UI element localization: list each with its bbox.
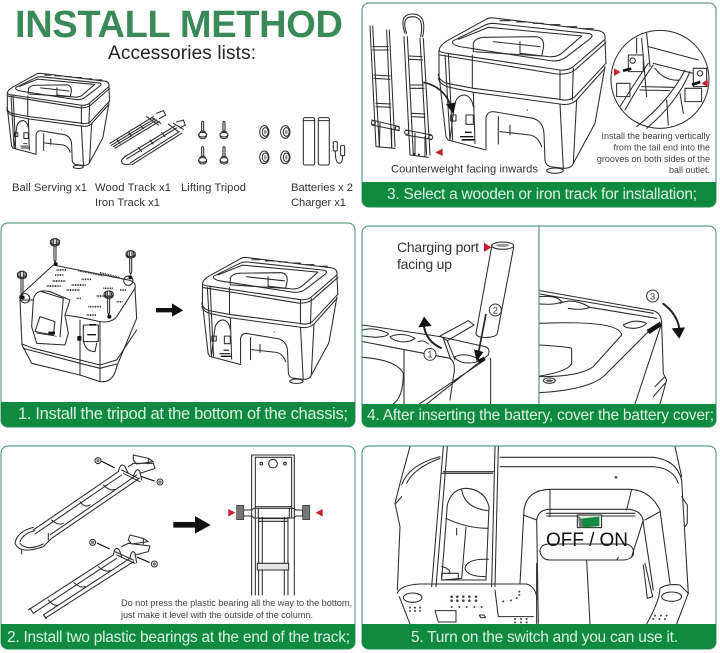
step 1 caption bar: 1. Install the tripod at the bottom of the chassis; [18, 405, 348, 423]
step number 3 [647, 290, 659, 302]
arrow: close cover [663, 303, 685, 339]
step 1 caption bar [1, 402, 355, 427]
charging port note [397, 239, 479, 272]
bearing note: grooves on both sides of the [597, 154, 710, 164]
icon: wood track with bearings [28, 535, 157, 618]
accessory labels: Charger x1 [291, 197, 346, 209]
arrow: to front view [173, 516, 211, 534]
charging port note: facing up [397, 256, 452, 272]
icon: bearings [260, 126, 290, 164]
panel: step 3 select track [362, 3, 716, 207]
bearing press note [120, 598, 352, 620]
assembled machine [202, 257, 338, 383]
bearing press note: Do not press the plastic bearing all the way to the bottom, [121, 598, 352, 608]
panel: step 2 install bearings [1, 446, 355, 649]
arrow: track insert [423, 82, 456, 114]
step 3 caption bar [362, 182, 716, 207]
step number 3: 3 [650, 291, 655, 301]
step 4 caption bar: 4. After inserting the battery, cover the battery cover; [367, 407, 714, 424]
icon: wood and iron tracks [110, 111, 185, 165]
accessory labels: Lifting Tripod [181, 182, 246, 194]
arrow: insert battery [474, 314, 486, 363]
accessories heading: Accessories lists: [108, 43, 256, 64]
machine underside [395, 447, 688, 624]
bearing press note: just make it level with the outside of the column. [120, 610, 313, 620]
step 5 caption bar [362, 624, 716, 649]
panel: step 1 install tripod [1, 223, 355, 427]
accessory labels: Ball Serving x1 [12, 182, 87, 194]
accessory labels: Iron Track x1 [95, 197, 160, 209]
icon: ball serving machine [7, 73, 110, 168]
upside-down machine with feet [17, 239, 183, 382]
icon: short track [370, 26, 399, 148]
bearing note: Install the bearing vertically [601, 131, 710, 141]
step 2 caption bar: 2. Install two plastic bearings at the end of the track; [7, 629, 350, 646]
accessory labels: Wood Track x1 [95, 182, 171, 194]
title: INSTALL METHOD [15, 4, 343, 46]
icon: green switch [577, 515, 602, 528]
accessory labels [12, 182, 353, 209]
arrow: to assembled [156, 303, 183, 317]
step number 2: 2 [493, 305, 498, 315]
detail circle [611, 30, 709, 128]
charging port note: Charging port [397, 239, 479, 255]
icon: looped track [403, 14, 433, 157]
icon: iron track with bearings [15, 455, 163, 554]
arrow: open cover [418, 317, 442, 348]
panel: step 5 switch on [362, 446, 716, 649]
step number 1: 1 [427, 350, 433, 360]
panel: accessories list [7, 73, 353, 209]
panel: step 4 insert battery [362, 226, 716, 427]
switch label: OFF / ON [546, 530, 628, 551]
bearing note [597, 131, 710, 175]
bearing note: ball outlet. [669, 165, 710, 175]
track note: Counterweight facing inwards [391, 164, 538, 176]
step number 2 [489, 304, 501, 316]
step 3 caption bar: 3. Select a wooden or iron track for installation; [387, 186, 697, 203]
icon: track front view [228, 455, 323, 595]
icon: tripod bolts [17, 239, 135, 315]
left battery scene [363, 321, 491, 404]
accessory labels: Batteries x 2 [291, 182, 353, 194]
step 5 caption bar: 5. Turn on the switch and you can use it. [411, 629, 678, 646]
machine with tracks [370, 14, 709, 173]
right cover scene [540, 291, 667, 404]
icon: red pointer [435, 149, 443, 156]
step 2 caption bar [1, 624, 355, 649]
icon: battery [476, 242, 514, 337]
step number 1 [424, 348, 436, 360]
bearing note: from the tail end into the [613, 142, 710, 152]
icon: batteries and charger [303, 118, 345, 165]
icon: lifting tripod feet [199, 121, 228, 164]
